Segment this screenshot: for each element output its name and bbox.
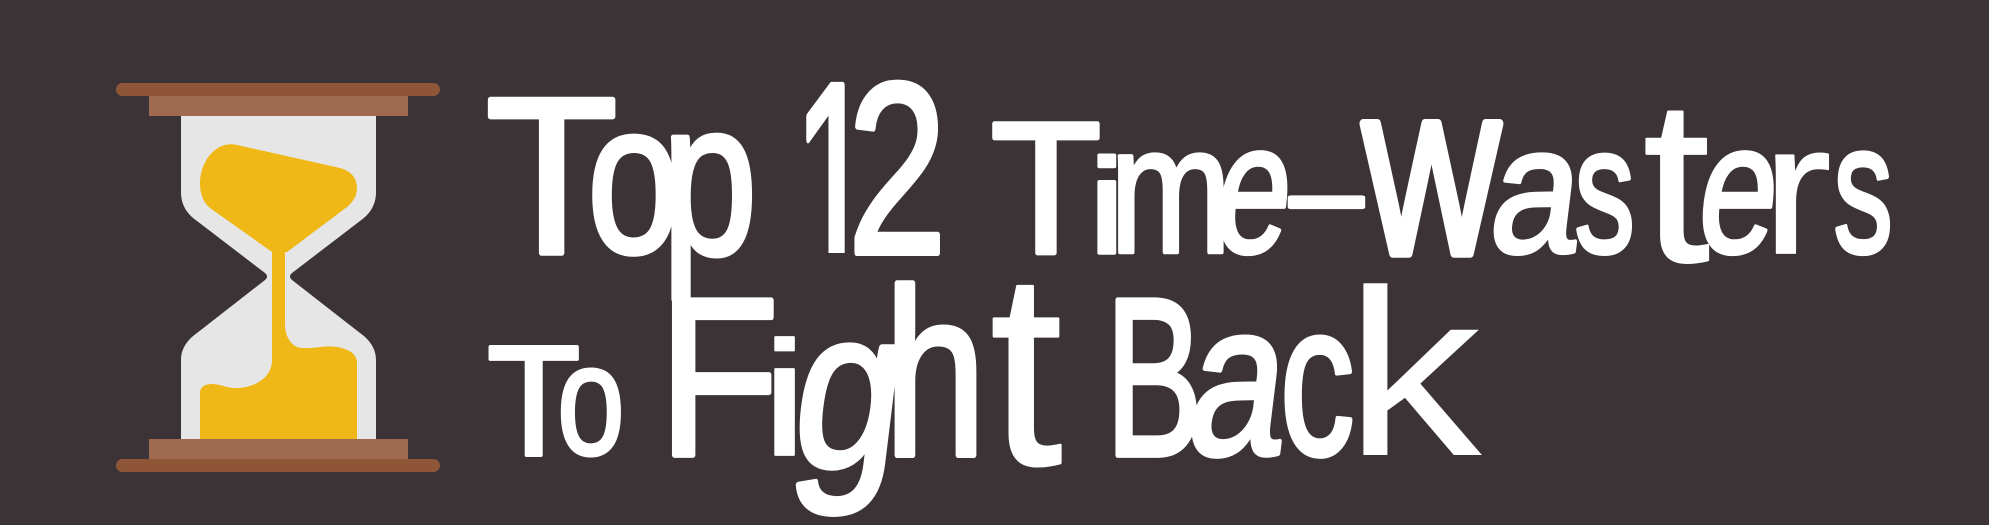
title — [488, 80, 1890, 517]
title line 1: Top 12 Time-Wasters: T — [990, 84, 1102, 294]
title line 2: To Fight Back: h — [884, 240, 986, 505]
title line 2: To Fight Back — [487, 215, 1483, 523]
title line 2: To Fight Back: t — [990, 215, 1063, 523]
title line 1: Top 12 Time-Wasters: m — [1110, 88, 1231, 291]
title line 1: Top 12 Time-Wasters — [488, 80, 1890, 302]
title line 1: Top 12 Time-Wasters: o — [587, 58, 680, 298]
title line 2: To Fight Back: B — [1105, 252, 1203, 504]
title line 1: Top 12 Time-Wasters: i — [1088, 132, 1125, 282]
title line 1: Top 12 Time-Wasters: - — [1278, 117, 1374, 266]
title line 1: Top 12 Time-Wasters: T — [486, 51, 618, 301]
title line 1: Top 12 Time-Wasters: s — [1833, 84, 1893, 291]
title line 1: Top 12 Time-Wasters: 1 — [794, 26, 874, 338]
title line 2: To Fight Back: F — [658, 251, 779, 503]
title line 2: To Fight Back: i — [761, 308, 808, 490]
icon: hourglass — [116, 83, 440, 472]
hourglass glass body — [181, 116, 376, 439]
title line 2: To Fight Back: a — [1177, 257, 1303, 500]
title line 1: Top 12 Time-Wasters: p — [662, 55, 757, 300]
title line 1: Top 12 Time-Wasters: r — [1762, 85, 1831, 293]
title line 1: Top 12 Time-Wasters: s — [1574, 89, 1635, 291]
hourglass sand — [200, 144, 357, 439]
title line 1: Top 12 Time-Wasters: W — [1362, 83, 1500, 293]
title line 1: Top 12 Time-Wasters: t — [1643, 52, 1710, 310]
title line 2: To Fight Back: T — [487, 313, 580, 488]
title line 2: To Fight Back: k — [1345, 242, 1483, 506]
title line 1: Top 12 Time-Wasters: e — [1206, 85, 1305, 292]
title line 2: To Fight Back: g — [782, 261, 921, 515]
bottom cap — [116, 439, 440, 472]
title line 1: Top 12 Time-Wasters: e — [1689, 85, 1792, 291]
title line 1: Top 12 Time-Wasters: 2 — [848, 34, 947, 306]
banner — [116, 80, 1890, 517]
title line 2: To Fight Back: o — [557, 312, 624, 488]
title line 2: To Fight Back: c — [1280, 259, 1354, 501]
top cap — [116, 83, 440, 116]
title line 1: Top 12 Time-Wasters: a — [1481, 90, 1594, 291]
